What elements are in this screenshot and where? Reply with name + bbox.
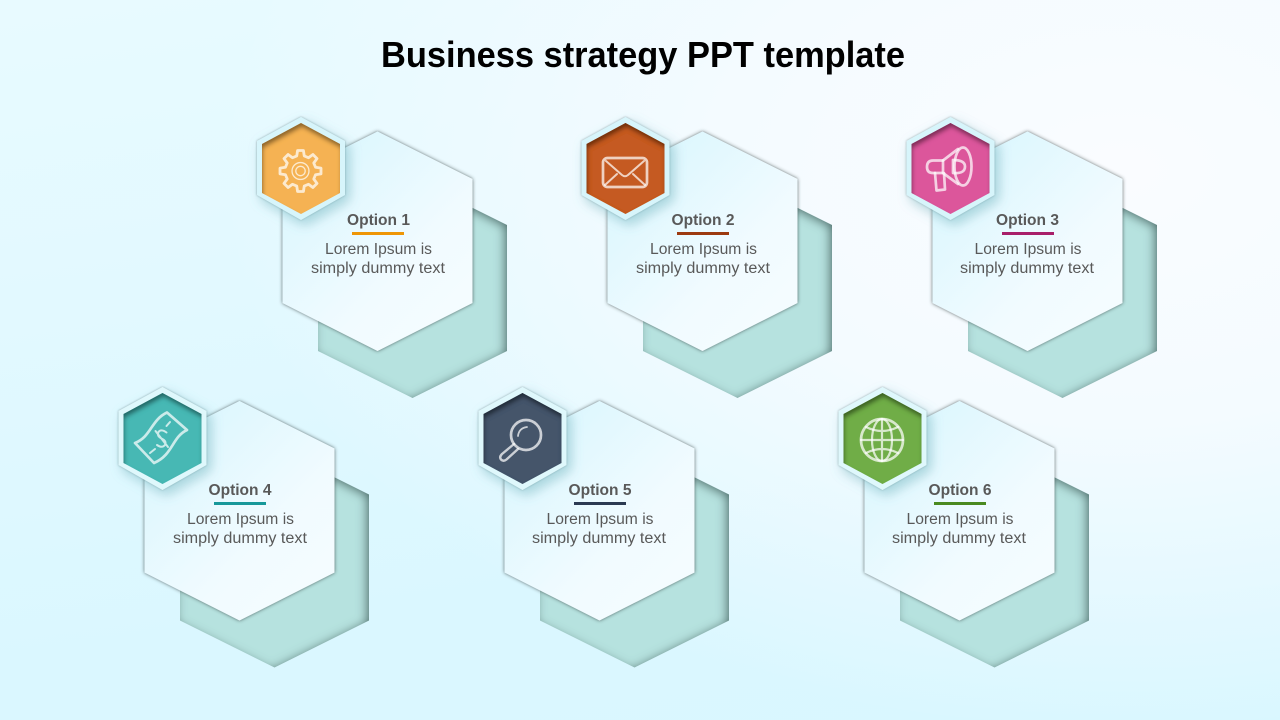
panel: option 5 <box>478 387 729 668</box>
text block 5: Lorem Ipsum is <box>546 511 654 528</box>
icon: globe <box>861 419 903 461</box>
text block 4: Lorem Ipsum is <box>187 511 294 528</box>
text block 6: Lorem Ipsum is <box>906 511 1014 528</box>
text block 3: simply dummy text <box>960 260 1095 277</box>
panel: option 6 <box>838 387 1089 668</box>
underline 2 <box>677 232 729 235</box>
front hexagon 6 <box>864 401 1054 620</box>
icon badge fill 6 <box>844 393 922 484</box>
underline 1 <box>352 232 404 235</box>
front hexagon 5 <box>504 401 694 620</box>
heading: option 2: Option 2 <box>672 212 735 229</box>
front hexagon 3 <box>932 132 1122 351</box>
icon badge fill 2 <box>586 123 664 214</box>
title: Business strategy PPT template <box>381 34 905 75</box>
icon badge frame 3 <box>906 117 994 220</box>
heading: option 4: Option 4 <box>208 482 272 499</box>
icon: megaphone <box>927 148 972 190</box>
icon badge frame 6 <box>838 387 926 490</box>
back hexagon 4 <box>180 448 369 668</box>
back hexagon 1 <box>318 178 507 398</box>
icon badge fill 4 <box>124 393 202 484</box>
icon badge fill 1 <box>262 123 340 214</box>
underline 3 <box>1002 232 1054 235</box>
heading: option 6: Option 6 <box>928 482 992 499</box>
icon: envelope <box>603 158 647 187</box>
text block 2: simply dummy text <box>636 260 771 277</box>
icon: banknote <box>135 412 187 463</box>
underline 4 <box>214 502 266 505</box>
heading: option 1: Option 1 <box>347 212 410 229</box>
icon: gear <box>280 151 321 191</box>
back hexagon 2 <box>643 178 832 398</box>
text block 2: Lorem Ipsum is <box>650 241 757 258</box>
icon: magnifier <box>500 420 541 461</box>
underline 5 <box>574 502 626 505</box>
icon badge frame 2 <box>582 117 670 220</box>
heading: option 3: Option 3 <box>996 212 1059 229</box>
underline 6 <box>934 502 986 505</box>
text block 1: simply dummy text <box>311 260 446 277</box>
front hexagon 2 <box>608 132 798 351</box>
front hexagon 1 <box>282 132 472 351</box>
icon badge frame 1 <box>257 117 345 220</box>
panel: option 1 <box>257 117 507 398</box>
back hexagon 6 <box>900 448 1089 668</box>
text block 1: Lorem Ipsum is <box>325 241 432 258</box>
back hexagon 5 <box>540 448 729 668</box>
icon badge fill 5 <box>484 393 562 484</box>
icon badge fill 3 <box>912 123 990 214</box>
text block 6: simply dummy text <box>892 530 1027 547</box>
heading: option 5: Option 5 <box>568 482 632 499</box>
icon badge frame 5 <box>478 387 566 490</box>
text block 4: simply dummy text <box>173 530 308 547</box>
front hexagon 4 <box>144 401 334 620</box>
icon badge frame 4 <box>118 387 206 490</box>
text block 3: Lorem Ipsum is <box>974 241 1082 258</box>
back hexagon 3 <box>968 178 1157 398</box>
panel: option 3 <box>906 117 1157 398</box>
text block 5: simply dummy text <box>532 530 667 547</box>
panel: option 2 <box>582 117 832 398</box>
panel: option 4 <box>118 387 369 668</box>
